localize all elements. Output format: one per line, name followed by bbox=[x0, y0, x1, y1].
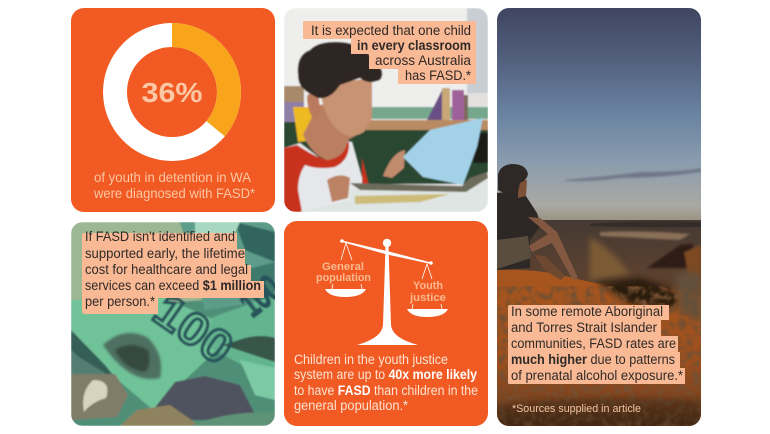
text: 40x more likely: to have FASD than children in the bbox=[294, 383, 478, 398]
text: 40x more likely: system are up to 40x more likely bbox=[294, 367, 478, 382]
donut value: 36% bbox=[142, 77, 203, 108]
photo: Australian hundred dollar notes: 100 bbox=[232, 267, 288, 324]
text: 40x more likely: Children in the youth justice bbox=[294, 352, 448, 367]
callout: remote communities: and Torres Strait Islander bbox=[511, 320, 658, 335]
label: youth justice: Youth bbox=[413, 280, 443, 292]
callout: remote communities: of prenatal alcohol exposure.* bbox=[511, 368, 683, 383]
text: 40x more likely: general population.* bbox=[294, 398, 408, 413]
panel: 36% donut statistic bbox=[71, 8, 275, 212]
photo: boy reading a book bbox=[284, 8, 488, 212]
callout: one child in every classroom: It is expected that one child bbox=[311, 23, 471, 38]
panel: money photo bbox=[71, 222, 288, 426]
panel: outback landscape photo bbox=[497, 8, 701, 426]
callout: lifetime cost bbox=[82, 229, 264, 314]
callout: remote communities: much higher due to patterns bbox=[511, 352, 675, 367]
callout: one child in every classroom: has FASD.* bbox=[405, 68, 471, 83]
panel: scales statistic bbox=[284, 221, 488, 426]
photo: person overlooking remote landscape bbox=[497, 8, 701, 426]
label: general population bbox=[316, 261, 371, 284]
callout: lifetime cost: cost for healthcare and legal bbox=[85, 262, 248, 277]
callout: one child in every classroom: in every classroom bbox=[357, 38, 471, 53]
label: general population: General bbox=[322, 261, 364, 273]
donut chart bbox=[115, 23, 241, 149]
callout: lifetime cost: supported early, the lifetime bbox=[85, 246, 245, 261]
photo: Australian hundred dollar notes: 100 bbox=[144, 284, 243, 374]
text: 40x more likely bbox=[294, 352, 478, 413]
callout: remote communities bbox=[508, 304, 685, 384]
label: general population: population bbox=[316, 272, 371, 284]
caption: youth in detention bbox=[93, 170, 255, 201]
caption: youth in detention: were diagnosed with FASD* bbox=[93, 186, 255, 201]
label: youth justice: justice bbox=[409, 292, 446, 304]
callout: remote communities: In some remote Aboriginal bbox=[511, 304, 663, 319]
callout: lifetime cost: If FASD isn't identified and bbox=[85, 229, 235, 244]
callout: remote communities: communities, FASD rates are bbox=[511, 336, 676, 351]
icon: balance scales bbox=[325, 239, 448, 345]
label: youth justice bbox=[409, 280, 446, 304]
callout: lifetime cost: services can exceed $1 million bbox=[85, 278, 261, 293]
callout: one child in every classroom: across Australia bbox=[375, 53, 472, 68]
caption: youth in detention: of youth in detention in WA bbox=[94, 170, 251, 185]
callout: one child in every classroom bbox=[303, 21, 476, 84]
photo: Australian hundred dollar notes bbox=[71, 222, 288, 426]
panel: boy reading photo bbox=[284, 8, 488, 212]
callout: lifetime cost: per person.* bbox=[85, 294, 155, 309]
footnote: sources: *Sources supplied in article bbox=[512, 403, 641, 415]
